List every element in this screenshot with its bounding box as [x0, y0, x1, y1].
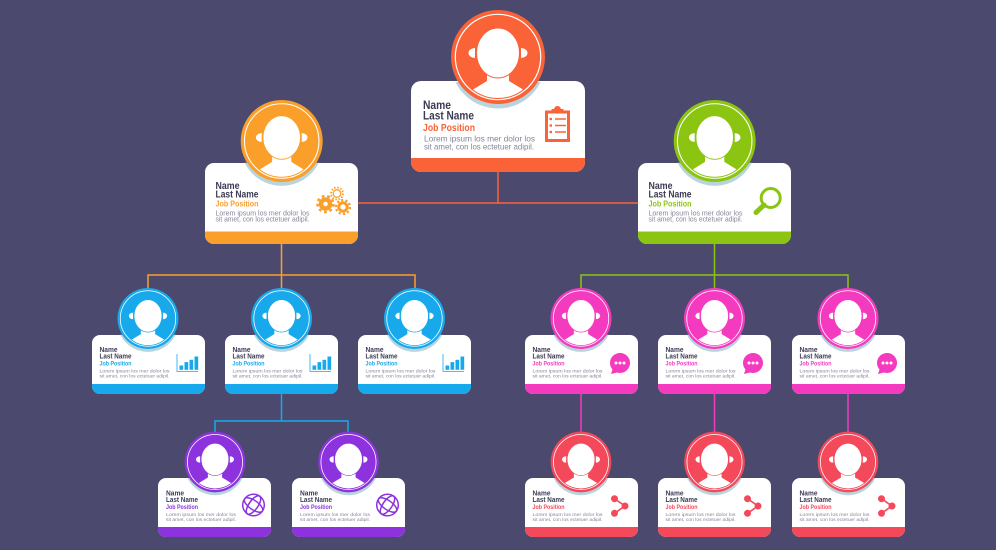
node: pink staff 1: sit amet, con los ectetuer adipil. — [532, 374, 602, 380]
node: red staff 1: Job Position — [532, 505, 565, 511]
icon: clipboard — [546, 106, 568, 140]
node: blue staff 1: Last Name — [100, 354, 132, 360]
node: pink staff 2: Lorem ipsum los mer dolor los — [666, 368, 736, 374]
node: top executive: Last Name — [423, 108, 474, 122]
node: red staff 2: Last Name — [666, 497, 698, 504]
node: red staff 2: Name — [666, 490, 684, 498]
node: pink staff 3: Last Name — [800, 354, 832, 360]
node: blue staff 2: Last Name — [232, 354, 265, 360]
node: green manager: sit amet, con los ectetuer adipil. — [648, 216, 743, 224]
node: orange manager — [205, 100, 358, 244]
icon: globe — [372, 490, 403, 520]
connectors: green branch — [581, 244, 848, 290]
node: orange manager: Lorem ipsum los mer dolor los — [216, 210, 310, 218]
node: purple staff 1: Name — [166, 490, 184, 498]
node: red staff 3: Last Name — [800, 497, 832, 504]
node: red staff 1: Lorem ipsum los mer dolor los — [532, 512, 603, 518]
icon: chat bubble — [877, 353, 897, 374]
node: red staff 1: Name — [532, 490, 551, 498]
connectors: top level — [358, 172, 638, 203]
node: top executive: Name — [423, 98, 451, 112]
node: blue staff 3: sit amet, con los ectetuer adipil. — [366, 374, 436, 380]
node: blue staff 1: sit amet, con los ectetuer adipil. — [100, 374, 170, 380]
node: pink staff 2: Name — [666, 347, 684, 354]
node: pink staff 3: Name — [800, 347, 818, 354]
node: orange manager: Name — [216, 181, 240, 192]
node: green manager: Job Position — [648, 198, 692, 208]
node: blue staff 3: Job Position — [366, 362, 398, 368]
icon: bar chart — [443, 354, 464, 372]
icon: share — [744, 495, 762, 517]
node: blue staff 1: Job Position — [100, 362, 132, 368]
node: red staff 2: Job Position — [666, 505, 698, 511]
node: purple staff 2 — [292, 432, 405, 537]
node: blue staff 3: Name — [366, 347, 384, 354]
connectors: orange branch — [148, 244, 415, 290]
node: orange manager: sit amet, con los ectetuer adipil. — [216, 216, 310, 224]
node: blue staff 1: Lorem ipsum los mer dolor los — [100, 368, 170, 374]
node: pink staff 1: Name — [532, 347, 551, 354]
node: pink staff 1: Lorem ipsum los mer dolor los — [532, 368, 603, 374]
node: top executive: Lorem ipsum los mer dolor los — [424, 134, 535, 144]
node: pink staff 1: Last Name — [532, 354, 565, 360]
node: pink staff 3: Lorem ipsum los mer dolor los — [800, 368, 870, 374]
node: purple staff 1: Last Name — [166, 497, 198, 504]
node: purple staff 2: Job Position — [300, 505, 332, 511]
node: pink staff 2: sit amet, con los ectetuer adipil. — [666, 374, 736, 380]
node: purple staff 1 — [158, 432, 271, 537]
node: blue staff 2: Lorem ipsum los mer dolor los — [232, 368, 303, 374]
icon: bar chart — [177, 354, 198, 372]
node: pink staff 3: Job Position — [800, 362, 832, 368]
icon: magnifier — [756, 188, 780, 212]
node: green manager: Last Name — [648, 190, 692, 200]
node: pink staff 2 — [658, 288, 771, 394]
node: pink staff 1: Job Position — [532, 362, 565, 368]
node: pink staff 3 — [792, 288, 905, 394]
node: red staff 1: Last Name — [532, 497, 565, 504]
node: red staff 3: Lorem ipsum los mer dolor los — [800, 512, 870, 518]
node: pink staff 2: Job Position — [666, 362, 698, 368]
icon: chat bubble — [610, 353, 630, 374]
node: red staff 2 — [658, 432, 771, 537]
node: top executive: sit amet, con los ectetuer adipil. — [424, 142, 534, 152]
node: blue staff 2: sit amet, con los ectetuer adipil. — [232, 374, 302, 380]
node: red staff 3: Name — [800, 490, 818, 498]
node: orange manager: Last Name — [216, 190, 259, 200]
icon: globe — [238, 490, 269, 520]
node: red staff 2: sit amet, con los ectetuer adipil. — [666, 517, 736, 523]
icon: gears — [318, 188, 350, 214]
icon: bar chart — [310, 354, 331, 372]
node: pink staff 2: Last Name — [666, 354, 698, 360]
connectors: blue to purple — [215, 394, 348, 434]
node: orange manager: Job Position — [216, 198, 258, 208]
node: red staff 3 — [792, 432, 905, 537]
node: blue staff 2: Job Position — [232, 362, 265, 368]
node: blue staff 1 — [92, 288, 205, 394]
node: purple staff 2: Name — [300, 490, 318, 498]
icon: share — [878, 495, 896, 517]
node: red staff 2: Lorem ipsum los mer dolor los — [666, 512, 736, 518]
node: red staff 3: Job Position — [800, 505, 832, 511]
node: pink staff 1 — [525, 288, 638, 394]
connectors: pink to red — [581, 394, 848, 434]
node: purple staff 1: sit amet, con los ectetuer adipil. — [166, 517, 236, 523]
node: pink staff 3: sit amet, con los ectetuer adipil. — [800, 374, 870, 380]
icon: chat bubble — [743, 353, 763, 374]
node: purple staff 1: Lorem ipsum los mer dolor los — [166, 512, 237, 518]
node: green manager — [638, 100, 791, 244]
node: red staff 3: sit amet, con los ectetuer adipil. — [800, 517, 870, 523]
node: blue staff 3: Lorem ipsum los mer dolor los — [366, 368, 436, 374]
node: purple staff 2: sit amet, con los ectetuer adipil. — [300, 517, 370, 523]
node: blue staff 3 — [358, 288, 471, 394]
node: red staff 1: sit amet, con los ectetuer adipil. — [532, 517, 602, 523]
node: green manager: Name — [648, 181, 673, 192]
node: blue staff 2: Name — [232, 347, 251, 354]
node: top executive — [411, 10, 585, 172]
node: purple staff 1: Job Position — [166, 505, 198, 511]
node: blue staff 2 — [225, 288, 338, 394]
node: red staff 1 — [525, 432, 638, 537]
node: green manager: Lorem ipsum los mer dolor los — [648, 210, 743, 218]
icon: share — [611, 495, 628, 517]
node: purple staff 2: Last Name — [300, 497, 332, 504]
node: blue staff 1: Name — [100, 347, 118, 354]
node: top executive: Job Position — [423, 123, 475, 134]
node: blue staff 3: Last Name — [366, 354, 398, 360]
node: purple staff 2: Lorem ipsum los mer dolor los — [300, 512, 371, 518]
